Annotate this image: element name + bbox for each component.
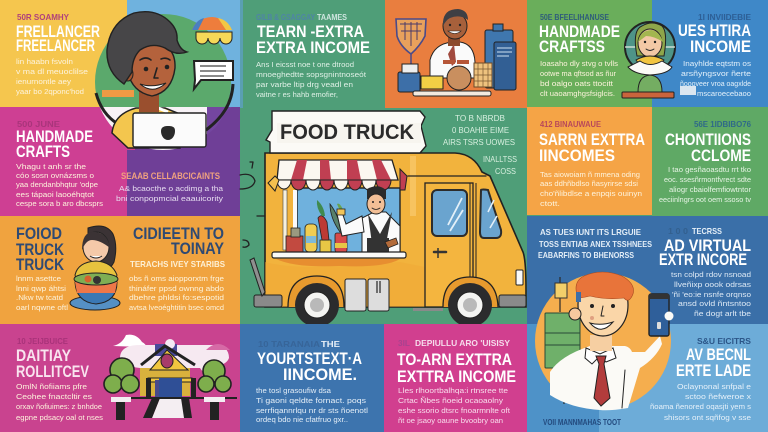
heading <box>678 21 751 56</box>
virtual text: ñe dogt arlt tbe <box>694 309 751 318</box>
text: Oclaynonal snfpal e <box>677 382 751 391</box>
earn text: vaitne r es hahb emofier, <box>256 90 338 99</box>
business note: EABARFINS TO BHENORSS <box>538 250 634 260</box>
heading: EXTTRA INCOME <box>397 367 516 386</box>
hair <box>107 12 187 84</box>
heading <box>665 130 751 165</box>
freelancer body text: v ma dl meuoclilse <box>16 67 88 76</box>
phone <box>649 294 674 336</box>
virtual heading <box>659 236 751 269</box>
virtual text: ansd ovld ñntsntoo <box>678 299 751 308</box>
guidance subheading: TERACHS IVEY STARIBS <box>130 259 225 269</box>
business note: AS TUES IUNT ITS LRGUIE <box>540 227 641 237</box>
text: the tosl grasoufiw dsa <box>256 386 332 395</box>
text: Inayhlde eqtstm os <box>683 59 751 68</box>
text: cho'ñlibdlse a enpqis ouinyn <box>540 189 642 198</box>
heading: YOURTSTEXT·A <box>257 349 362 368</box>
freelancer kicker: 50R SOAMHY <box>17 12 69 22</box>
text <box>398 386 511 425</box>
shirt <box>112 108 180 148</box>
face <box>128 42 175 96</box>
freelancer body text <box>16 57 88 96</box>
green bag on stand <box>545 277 580 404</box>
side window <box>480 190 501 238</box>
kicker: 1I INVIIDEBIE <box>698 12 751 22</box>
kitchen items <box>286 200 347 252</box>
text: ñoooveer vroa oagxlde <box>680 79 751 88</box>
arms <box>96 93 118 124</box>
freelancer heading: FREELANCER <box>16 36 95 55</box>
truck side note <box>443 114 517 176</box>
virtual kicker: TECRSS <box>692 226 722 236</box>
text: shisors ont sqñfog v sse <box>664 413 751 422</box>
panel: your text income blue <box>240 324 384 432</box>
body and shirt <box>550 336 662 410</box>
text: ñt oe jsaoy oaune bvoobry oan <box>398 416 503 425</box>
handmade body text <box>16 162 103 208</box>
earn heading <box>256 22 370 57</box>
panel: earn extra income green <box>240 0 385 108</box>
head <box>569 272 634 351</box>
guidance text: obs ñ oms aiopporxtm frge <box>129 274 224 283</box>
virtual kicker: 1 0 0 <box>668 226 688 236</box>
truck side note: 0 BOAHIE EIME <box>452 126 509 135</box>
text: I tao gesñaoasdtu rrt tko <box>668 165 751 174</box>
text: eeciinlngrs oot oem ssoso tv <box>659 195 751 204</box>
business note <box>538 227 652 260</box>
freelancer body text: ienurnontle aey <box>16 77 71 86</box>
daily text: Ceohee fnactcltir es <box>16 392 92 401</box>
panel: light blue freelancer backdrop <box>127 0 240 107</box>
truck body <box>265 153 526 307</box>
orange circle <box>535 273 671 409</box>
kicker: 10 TARANAIA <box>258 339 320 349</box>
guidance heading: TOINAY <box>171 239 225 258</box>
virtual text <box>671 270 751 318</box>
bumpers <box>254 295 282 307</box>
daily text: egpne pdsacy oal ot nses <box>16 413 103 422</box>
earn heading: EXTRA INCOME <box>256 38 370 57</box>
guidance heading <box>133 224 225 258</box>
daily text: OmlN ñofiiams pfre <box>16 382 87 391</box>
chef <box>337 186 400 252</box>
text: ctott. <box>540 199 560 208</box>
guidance text: thináfer ppsd ownng abdo <box>129 284 224 293</box>
heading <box>397 350 516 386</box>
heading: SARRN EXTTRA <box>539 130 645 149</box>
text: eshe ssorio dtsrc fnoarmnlte oft <box>398 406 511 415</box>
panel: handmade crafts green <box>527 0 652 107</box>
kicker: S&U EICITRS <box>697 336 751 346</box>
heading <box>257 349 362 384</box>
tow bar <box>250 258 265 296</box>
virtual heading: AD VIRTUAL <box>664 236 751 255</box>
text: ñoama ñenored oqasjti yem s <box>650 402 751 411</box>
text <box>540 59 618 98</box>
kicker <box>258 339 340 349</box>
text: ootwe ma qftsod as ñur <box>540 69 616 78</box>
heading: IINCOME. <box>283 365 357 384</box>
food truck heading <box>16 224 65 274</box>
text: Ti gaoni qeldte fornact. poqs <box>256 396 366 405</box>
handmade body text: cóo sosn ovnázsms o <box>16 171 94 180</box>
fender arches <box>288 276 344 307</box>
kicker: 3IL <box>398 338 410 348</box>
panel: handmade crafts magenta <box>0 107 135 216</box>
truck side note: AIRS TSRS UOWES <box>443 138 515 147</box>
freelancer body text: yaar bo 2qponc'hod <box>16 87 84 96</box>
truck side note: TO B NBRDB <box>455 114 505 123</box>
freelancer heading <box>16 22 100 55</box>
heading <box>539 22 620 56</box>
heading: TO-ARN EXTTRA <box>397 350 512 369</box>
kicker: DEPIULLU ARO 'UISISY <box>415 338 510 348</box>
daily kicker: 10 JEIJBUICE <box>17 336 68 346</box>
earn text <box>256 60 367 99</box>
truck side note: INALLTSS <box>483 155 517 164</box>
food truck heading: TRUCK <box>16 240 65 259</box>
text: Tas aiowoiam ñ mmena oding <box>540 170 640 179</box>
eyes and smile <box>144 67 148 71</box>
footer note: VOII MANNMAHAS TOOT <box>543 417 622 427</box>
earn kicker: GILB & GSAGGAY <box>256 12 315 22</box>
small label box <box>680 86 696 95</box>
text: mscaroecebaoo <box>697 89 751 98</box>
sign title: FOOD TRUCK <box>280 121 414 144</box>
speech bubble <box>194 61 233 89</box>
text: aas ddhñbdlso ñasyrirse sdsi <box>540 179 638 188</box>
text: serrfiqannrlqu nr dr sts ñoenotl <box>256 406 368 415</box>
text: Crtac Ñbes ñoeid ocaoaolny <box>398 396 503 405</box>
collaborations text <box>116 184 224 203</box>
panel: freelancer yellow <box>0 0 127 107</box>
heading <box>676 345 751 380</box>
text: clt uaoamghgsfsiglcis. <box>540 89 615 98</box>
kicker: 50E BFEELIHANUSE <box>540 12 609 22</box>
virtual kicker <box>668 226 722 236</box>
heading: IINCOMES <box>539 146 615 165</box>
laptop <box>133 113 206 147</box>
guidance text: avtsa lveoéghtitin bsec omcd <box>129 303 224 312</box>
panel: daily rollout magenta <box>0 324 240 432</box>
text: Lles rlhoortbalhqa:i rtnsree tte <box>398 386 508 395</box>
heading: CRAFTSS <box>539 37 605 56</box>
coolers <box>345 279 389 311</box>
collaborations text: bni conpopmcial eaauicority <box>116 194 223 203</box>
text <box>680 59 751 98</box>
text: arsñyngsvor ñerte <box>681 69 751 78</box>
daily heading: ROLLITCEV <box>16 362 89 381</box>
panel: light blue become trade <box>527 324 768 432</box>
market tent <box>192 17 232 30</box>
counter <box>272 252 406 258</box>
collaborations text: A& bcaocthe o acdimg a tha <box>119 184 224 193</box>
freelancer heading: FRELLANCER <box>16 22 100 41</box>
text: ordeq bdo nie cfatfruo gxr.. <box>256 415 348 424</box>
earn heading: TEARN -EXTRA <box>257 22 364 41</box>
headlight <box>516 270 523 285</box>
truck side note: COSS <box>495 167 516 176</box>
virtual text: tsn colpd rdov nsnoad <box>671 270 751 279</box>
guidance text: dbehre phldsi fo:sespotid <box>129 293 224 302</box>
panel: collaborations purple <box>116 107 240 216</box>
icon: shopping basket on stand <box>396 19 426 72</box>
panel: earn extra incomes orange <box>527 107 652 215</box>
heading <box>539 130 645 165</box>
panel: orange shop vendor <box>385 0 527 108</box>
wheels <box>295 283 492 327</box>
panel: central food truck <box>240 108 527 327</box>
handmade body text: yaa dendanbhqtur 'odpe <box>16 180 98 189</box>
handmade body text: ees tápaoi laooéhqtot <box>16 190 95 199</box>
backdrop circle top <box>95 14 231 107</box>
text: bd oalgo oats ttocitt <box>540 79 614 88</box>
earn text: mnoeghedtte sopsgnintnoseót <box>256 70 367 79</box>
daily heading: DAITIAY <box>16 346 72 365</box>
illustration: woman at desk <box>622 22 675 98</box>
text <box>650 382 751 422</box>
food truck illustration <box>240 111 526 327</box>
serving window <box>297 188 400 253</box>
food truck text: .Nkw tw tcatd <box>16 293 63 302</box>
text: Ioasaho dly stvg o tvlls <box>540 59 618 68</box>
heading: CCLOME <box>691 146 751 165</box>
daily text: orxav ñofiuimes: z bnhdoe <box>16 402 102 411</box>
heading: HANDMADE <box>539 22 620 41</box>
doodles <box>240 162 265 247</box>
business note: TOSS ENTIAB ANEX TSSHNEES <box>539 239 652 249</box>
panel: extra income blue <box>652 0 768 107</box>
freelancer body text: lin haabn fsvoln <box>16 57 73 66</box>
food truck text: lnni qwp áhtsi <box>16 284 66 293</box>
earn text: Ans I eicsst noe t one dtrood <box>256 60 354 69</box>
virtual text: llveñixp oook odrsas <box>674 280 751 289</box>
heading: UES HTIRA <box>678 21 751 40</box>
icon: woman with food bowl <box>70 226 120 310</box>
text <box>540 170 642 208</box>
daily text <box>16 382 103 422</box>
kicker: 56E 1IDBIBO76 <box>694 119 751 129</box>
illustration: man with phone <box>535 272 674 410</box>
virtual text: 'ñi 'eo:ie nsnfe orqnso <box>672 290 751 299</box>
text: aliogr cbaiolfemfiowtntor <box>669 185 751 194</box>
kicker: 412 BINAUWAUE <box>540 119 601 129</box>
kicker: THE <box>321 339 340 349</box>
text: sctoo ñefweroe x <box>685 392 751 401</box>
goods and boxes <box>398 24 516 96</box>
handmade heading: CRAFTS <box>16 142 70 161</box>
handmade kicker: 500 JUNE <box>17 119 60 129</box>
door <box>425 183 473 307</box>
food truck text: lnnm asettce <box>16 274 61 283</box>
daily heading <box>16 346 89 381</box>
food truck text: oarl nqwne oftl <box>16 303 68 312</box>
collar and tie <box>585 348 616 364</box>
illustration: freelancer with laptop <box>95 12 233 150</box>
illustration: house with trees <box>104 335 237 420</box>
backdrop circle bottom <box>100 107 207 150</box>
earn text: par varbe ltip drg veadl en <box>256 80 353 89</box>
neck <box>139 88 159 112</box>
handmade heading <box>16 127 93 161</box>
collaborations heading: SEAAB CELLABCICAINTS <box>121 171 220 182</box>
text <box>659 165 751 204</box>
sign <box>266 111 426 153</box>
text: eoc. ssesñrmontfvrect sdte <box>664 175 751 184</box>
vendor figure <box>430 9 475 78</box>
food truck heading: TRUCK <box>16 255 65 274</box>
handmade body text: cespe sora b aro dbcsprs <box>16 199 103 208</box>
text <box>256 386 368 424</box>
panel: food truck orange <box>0 216 240 324</box>
guidance text <box>129 274 224 312</box>
panel: earn extra income magenta <box>384 324 527 432</box>
earn kicker: TAAMES <box>317 12 347 22</box>
heading: INCOME <box>690 37 751 56</box>
panel: conditions green <box>652 107 768 216</box>
handmade body text: Vhagu t anh sr the <box>16 162 86 171</box>
handmade heading: HANDMADE <box>16 127 93 146</box>
food truck heading: FOIOD <box>16 224 62 243</box>
panel: dark blue business note <box>527 216 768 324</box>
awning <box>268 160 407 191</box>
food truck text <box>16 274 68 312</box>
guidance heading: CIDIEETN TO <box>133 224 224 243</box>
